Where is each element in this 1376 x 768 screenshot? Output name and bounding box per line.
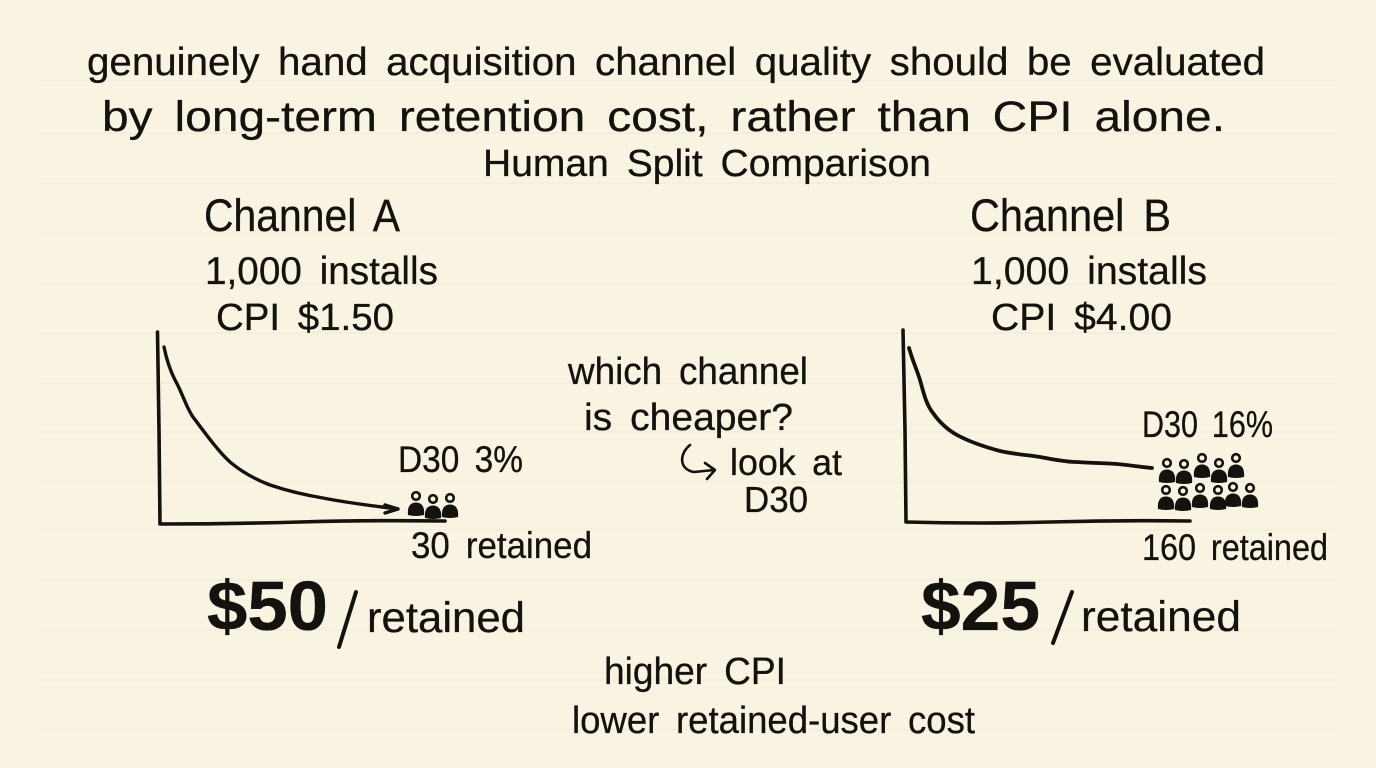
- retained count A: 30 retained: [411, 525, 592, 566]
- cost per retained A: retained: [367, 594, 525, 642]
- conclusion: higher CPI: [604, 651, 786, 693]
- panel: center question: [567, 351, 843, 520]
- chart: channel A retention curve: [158, 332, 445, 524]
- arrow: hook to D30: [682, 445, 715, 479]
- question text: [567, 351, 808, 439]
- cost per retained B: $25: [921, 567, 1040, 645]
- channel B installs: 1,000 installs: [971, 250, 1207, 293]
- channel A heading: Channel A: [204, 190, 400, 241]
- D30 label A: D30 3%: [398, 439, 523, 480]
- conclusion: lower retained-user cost: [572, 700, 975, 742]
- headline: genuinely hand acquisition channel quality should be evaluated: [87, 41, 1265, 84]
- D30 label B: D30 16%: [1142, 404, 1273, 445]
- cost per retained B: [921, 567, 1241, 645]
- channel B heading: Channel B: [970, 190, 1171, 241]
- channel A installs: 1,000 installs: [205, 250, 438, 293]
- channel A CPI: CPI $1.50: [216, 297, 394, 339]
- channel B CPI: CPI $4.00: [991, 297, 1172, 339]
- question text: which channel: [567, 351, 808, 393]
- headline: [87, 41, 1265, 141]
- conclusion: [572, 651, 975, 742]
- question text: is cheaper?: [584, 397, 793, 439]
- cost per retained A: [207, 567, 525, 647]
- hint text: D30: [744, 479, 808, 520]
- headline: by long-term retention cost, rather than CPI alone.: [102, 93, 1225, 141]
- retained count B: 160 retained: [1142, 527, 1328, 568]
- cost per retained B: retained: [1081, 593, 1241, 641]
- hint text: [730, 442, 843, 520]
- panel: channel A: [158, 190, 592, 647]
- chart: channel B retention curve: [903, 330, 1190, 523]
- panel: channel B: [903, 190, 1328, 645]
- cost per retained A: $50: [207, 567, 328, 645]
- icons: 3 retained people: [408, 492, 458, 519]
- hint text: look at: [730, 442, 843, 483]
- icons: 16 retained people: [1158, 454, 1258, 511]
- subtitle: Human Split Comparison: [483, 143, 931, 185]
